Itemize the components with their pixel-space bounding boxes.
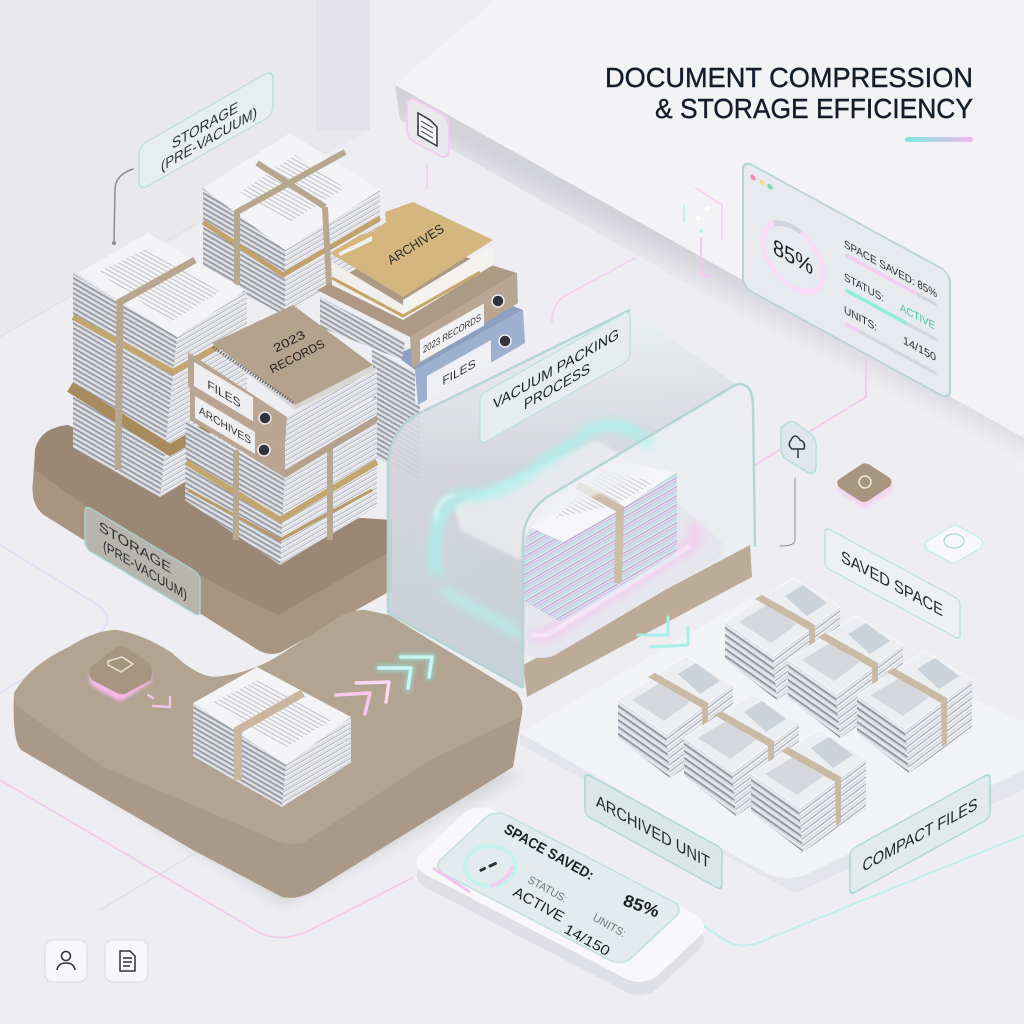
vacuum chamber — [388, 310, 755, 697]
label: storage platform: STORAGE — [99, 518, 171, 577]
arrow: tile to stack — [148, 695, 170, 707]
platform: storage base — [32, 425, 392, 654]
bottom status card: 85% — [621, 891, 662, 921]
vacuum stack — [523, 473, 677, 622]
notebook: 2023 records: 2023 — [271, 327, 308, 355]
label: vacuum packing process — [480, 310, 630, 445]
label: storage platform: (PRE-VACUUM) — [103, 538, 187, 604]
label: storage platform — [85, 505, 200, 617]
binder: files — [372, 305, 525, 405]
frosted paper mass — [455, 440, 650, 560]
binder: files — [188, 352, 377, 447]
label: saved space — [825, 527, 960, 640]
bright tray ring — [530, 525, 697, 637]
label: compact files: COMPACT FILES — [863, 793, 978, 876]
bottom status card — [408, 801, 713, 1001]
icon: brown tile right — [837, 463, 892, 509]
label: storage top: (PRE-VACUUM) — [161, 104, 257, 175]
raised upper platform — [395, 0, 1024, 476]
binder: 2023 records — [317, 240, 518, 368]
bottom status card: SPACE SAVED: — [501, 822, 596, 884]
label: storage top: STORAGE — [172, 98, 238, 153]
floor circuit lines — [0, 169, 1024, 946]
paper stack on transfer base — [193, 667, 351, 807]
label: vacuum packing process: VACUUM PACKING — [493, 325, 619, 413]
glass edges — [388, 310, 755, 688]
progress ring: 85% — [773, 234, 813, 280]
stats: 14/150 — [903, 334, 936, 364]
frosted glass shell — [388, 310, 737, 688]
bottom status card: ACTIVE — [510, 885, 567, 926]
icon: document tile — [407, 99, 449, 190]
binder: archives: ARCHIVES — [199, 403, 251, 447]
label: archived unit — [585, 773, 722, 890]
label: archived unit: ARCHIVED UNIT — [596, 790, 710, 872]
binder: archives — [190, 387, 377, 478]
bottom status card: 14/150 — [562, 921, 613, 959]
label: saved space: SAVED SPACE — [841, 547, 943, 620]
icon: cloud tile — [781, 422, 816, 473]
icon: brown tile left — [89, 646, 152, 701]
notebook: 2023 records: RECORDS — [267, 337, 327, 376]
progress ring — [756, 200, 830, 314]
stats: SPACE SAVED: 85% — [844, 238, 937, 301]
stack: left paper stack — [70, 233, 247, 497]
lower papers — [372, 375, 420, 480]
binder: files: FILES — [207, 377, 241, 411]
stack: folder and binders — [317, 202, 525, 480]
notebook: 2023 records — [212, 305, 373, 410]
binder: 2023 records: 2023 RECORDS — [423, 312, 481, 356]
icon: white tile right — [925, 525, 982, 563]
back glass tint — [523, 385, 755, 670]
platform: saved space — [520, 598, 1024, 893]
bottom status card: UNITS: — [591, 912, 628, 940]
bottom status card: STATUS: — [526, 874, 569, 905]
neon circuit node — [684, 188, 722, 276]
compact stacks — [618, 578, 972, 852]
title: & STORAGE EFFICIENCY — [655, 93, 973, 124]
label: vacuum packing process: PROCESS — [524, 360, 590, 414]
stats: STATUS: — [844, 271, 884, 305]
stats — [844, 238, 937, 376]
bright tray line — [532, 546, 690, 636]
icon: file tile — [105, 940, 148, 982]
icon: user tile — [45, 940, 87, 982]
arrows: right chevrons — [638, 617, 688, 647]
glass neon haze — [434, 425, 650, 575]
dashboard panel — [743, 160, 950, 400]
wall glass panel — [316, 0, 370, 130]
stats: ACTIVE — [900, 301, 935, 333]
title accent bar — [905, 137, 973, 142]
platform: brown transfer base — [14, 610, 522, 905]
folder: archives: ARCHIVES — [385, 221, 447, 268]
label: storage top — [139, 70, 273, 191]
stack: back paper stack — [203, 133, 380, 316]
stats: UNITS: — [844, 304, 877, 334]
brown base — [523, 545, 752, 697]
title: DOCUMENT COMPRESSION — [605, 62, 973, 93]
chamber tray — [440, 466, 724, 658]
stack: front binders and papers — [185, 305, 377, 565]
binder: files: FILES — [442, 356, 476, 388]
folder: archives — [330, 202, 493, 320]
arrows: process chevrons — [336, 657, 432, 714]
title — [605, 62, 973, 124]
label: compact files — [850, 773, 990, 895]
back wall — [0, 0, 370, 337]
